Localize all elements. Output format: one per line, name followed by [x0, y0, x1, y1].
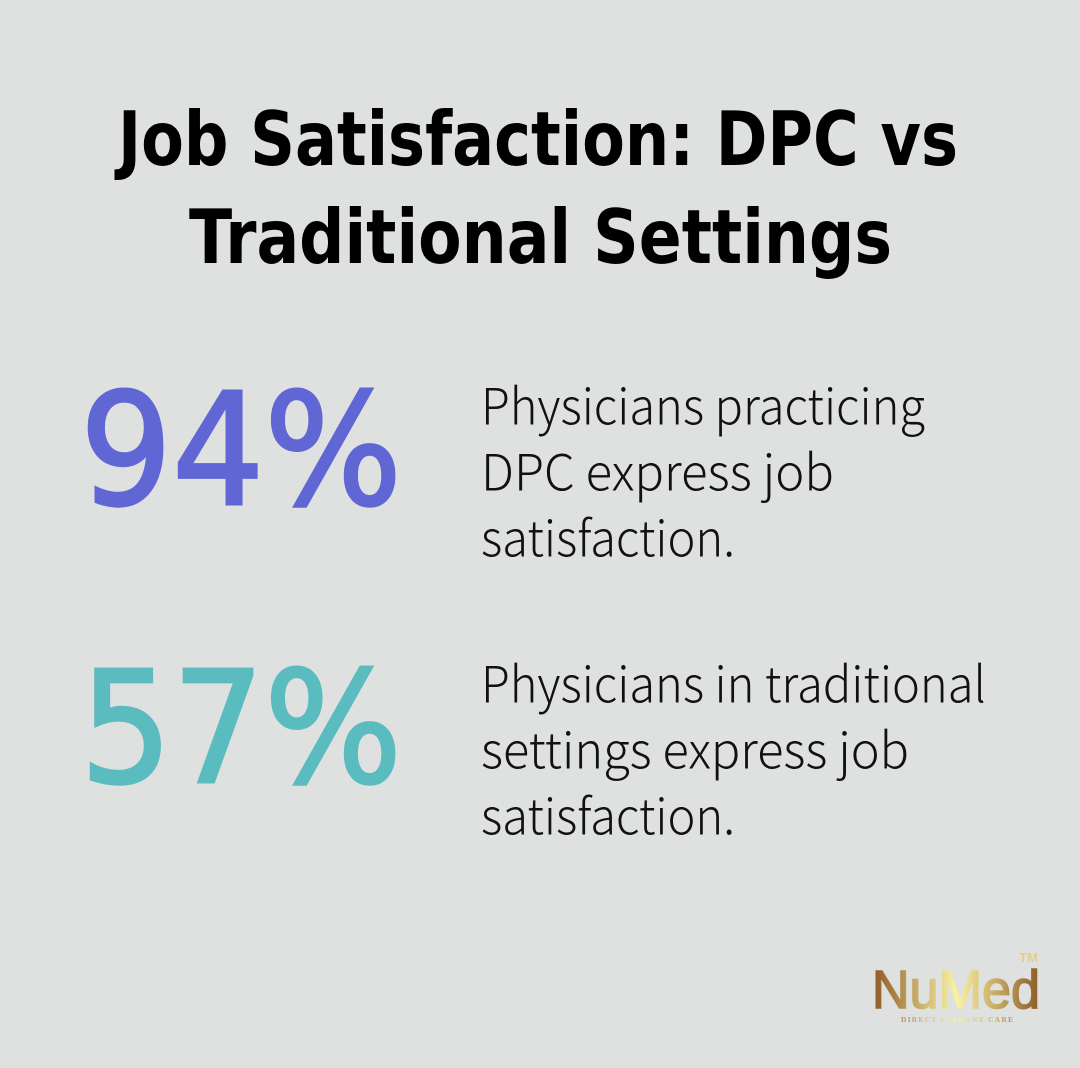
logo: NuMed: DIRECT PRIMARY CARE [901, 1015, 1013, 1024]
description: DPC physicians: DPC express job [481, 434, 834, 506]
logo: NuMed: NuMed [872, 960, 1040, 1020]
stat: 57 percent: 57% [80, 638, 402, 819]
description: DPC physicians: Physicians practicing [481, 368, 925, 440]
logo: NuMed: TM [1019, 950, 1038, 965]
description: traditional physicians: satisfaction. [481, 778, 735, 850]
description: traditional physicians [481, 646, 986, 850]
description: DPC physicians: satisfaction. [481, 500, 735, 572]
description: DPC physicians [481, 368, 925, 572]
title [114, 95, 958, 281]
description: traditional physicians: settings express job [481, 712, 909, 784]
title: Traditional Settings [189, 193, 892, 281]
description: traditional physicians: Physicians in traditional [481, 646, 986, 718]
stat: 94 percent: 94% [80, 360, 402, 541]
